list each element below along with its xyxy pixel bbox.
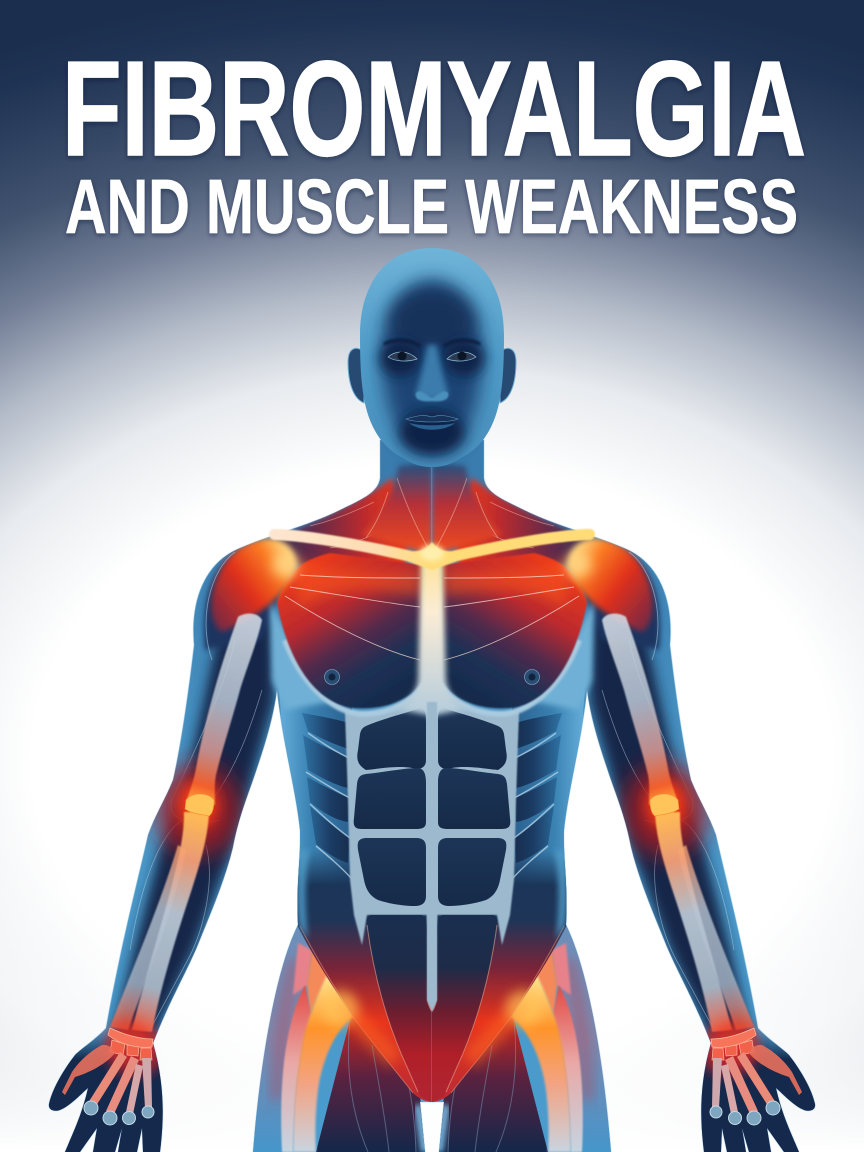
face bbox=[360, 248, 504, 467]
eyes bbox=[388, 352, 476, 361]
left half of body bbox=[40, 440, 432, 1152]
right half of body bbox=[432, 440, 824, 1152]
title bbox=[62, 33, 806, 250]
ear left bbox=[348, 348, 364, 403]
head bbox=[348, 248, 516, 467]
center abdominal line bbox=[427, 702, 437, 1012]
collarbones bbox=[269, 529, 595, 570]
ear right bbox=[500, 348, 516, 403]
nose bbox=[416, 345, 448, 400]
sternum bbox=[394, 554, 470, 716]
mouth bbox=[406, 416, 458, 422]
face shading bbox=[382, 280, 482, 454]
human figure bbox=[40, 248, 824, 1152]
brows bbox=[384, 340, 480, 346]
